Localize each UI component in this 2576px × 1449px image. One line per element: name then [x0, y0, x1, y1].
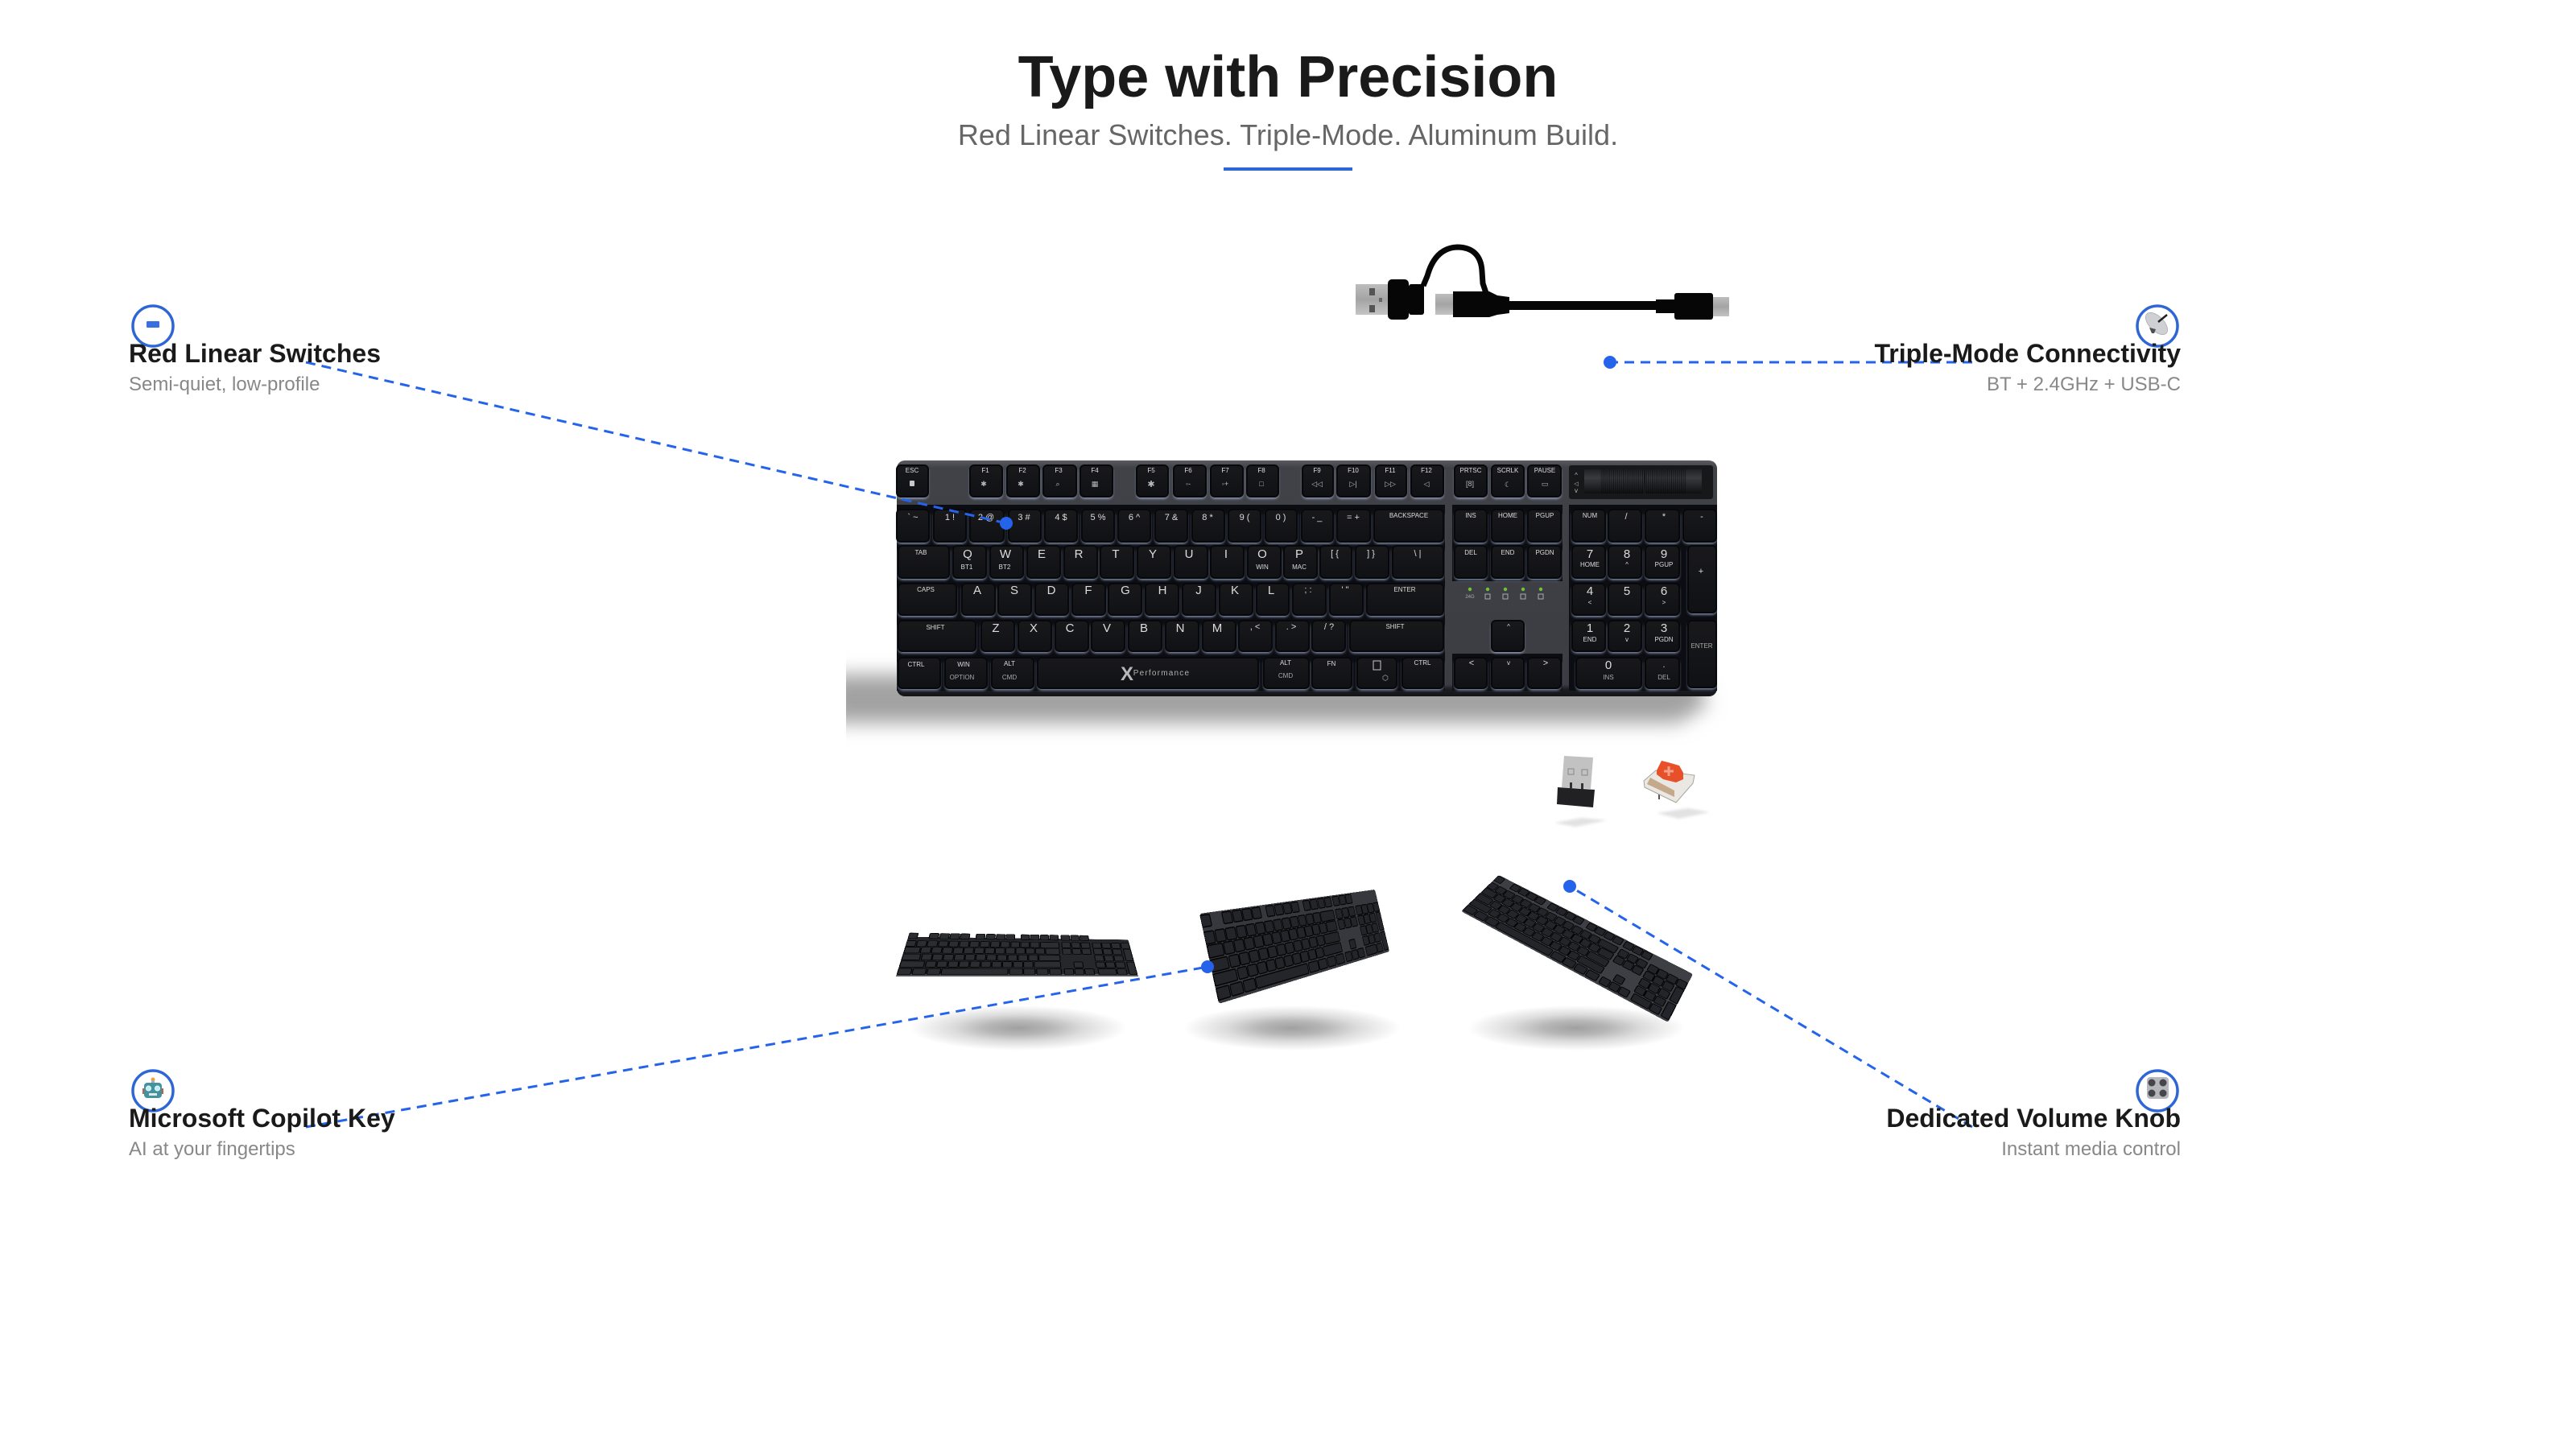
key legends: SHIFT	[926, 624, 945, 631]
key legends: ✱	[980, 480, 987, 488]
key legends: J	[1195, 584, 1202, 597]
key legends: / ?	[1324, 622, 1334, 632]
key legends: END	[1501, 549, 1515, 556]
key legends: HOME	[1580, 561, 1600, 568]
key legends: WIN	[1256, 564, 1269, 571]
callout: triple-mode connectivity	[1875, 306, 2181, 395]
icon: robot	[133, 1071, 173, 1111]
key legends: CMD	[1278, 672, 1293, 679]
callout: dedicated volume knob	[1886, 1071, 2181, 1160]
key legends: DEL	[1464, 549, 1477, 556]
key legends: F6	[1184, 467, 1192, 474]
key legends: ⬡	[1382, 674, 1389, 682]
key legends: L	[1268, 584, 1274, 597]
key legends: +	[1699, 567, 1703, 576]
key legends: = +	[1347, 513, 1360, 522]
volume knob: v	[1575, 487, 1578, 494]
key legends: ENTER	[1393, 586, 1416, 593]
key legends: K	[1231, 584, 1239, 597]
icon: keyboard	[133, 306, 173, 346]
key legends: PGUP	[1655, 561, 1673, 568]
key legends: ◁	[1424, 480, 1430, 488]
key legends: ◁◁	[1311, 480, 1323, 488]
key legends: W	[1000, 547, 1012, 561]
key legends: ▷▷	[1385, 480, 1396, 488]
key legends: .	[1662, 660, 1666, 670]
key legends: 0	[1605, 658, 1612, 672]
key legends: ; :	[1304, 585, 1312, 595]
key legends: v	[1507, 659, 1510, 667]
volume knob: ^	[1575, 472, 1578, 479]
key legends: 6 ^	[1129, 513, 1141, 522]
key legends: END	[1583, 636, 1597, 643]
key legends: D	[1047, 584, 1056, 597]
main keyboard	[829, 460, 1717, 723]
key legends: ] }	[1367, 549, 1375, 559]
key legends: ` ~	[907, 513, 919, 522]
key legends: ALT	[1004, 660, 1015, 667]
key legends: SHIFT	[1385, 623, 1405, 630]
keyboard cast shadow	[829, 675, 1708, 723]
key legends: F11	[1385, 467, 1396, 474]
key legends: 2 @	[978, 513, 994, 522]
key legends: v	[1625, 636, 1629, 643]
key legends: CTRL	[908, 661, 925, 668]
key legends: <	[1469, 658, 1474, 668]
key legends: /	[1624, 512, 1628, 522]
key legends: >	[1543, 658, 1548, 668]
leader line: triple-mode connectivity	[1604, 356, 1972, 369]
key legends: 9	[1661, 547, 1667, 561]
callout heading: Triple-Mode Connectivity	[1875, 339, 2181, 368]
key legends: 3 #	[1018, 513, 1031, 522]
key legends: FN	[1327, 660, 1336, 667]
callout description: Semi-quiet, low-profile	[129, 374, 320, 395]
key legends: TAB	[915, 549, 927, 556]
key legends: PGDN	[1654, 636, 1674, 643]
key legends: I	[1224, 547, 1228, 561]
key legends: - _	[1312, 513, 1323, 522]
key legends: F7	[1221, 467, 1229, 474]
key legends: ^	[1507, 623, 1510, 630]
key legends: ◦-	[1186, 480, 1191, 488]
leader line: volume knob	[1563, 880, 1972, 1127]
key legends: F5	[1147, 467, 1155, 474]
key legends: V	[1103, 621, 1111, 635]
key legends: NUM	[1583, 512, 1597, 519]
key legends: F	[1084, 584, 1092, 597]
key legends: [ {	[1331, 549, 1339, 559]
subtitle: Red Linear Switches. Triple-Mode. Aluminum Build.	[958, 118, 1618, 151]
key legends: S	[1010, 584, 1018, 597]
callout description: Instant media control	[2001, 1138, 2181, 1160]
callout heading: Dedicated Volume Knob	[1886, 1104, 2181, 1133]
product image: keyboard left angle	[1199, 890, 1389, 1003]
callout description: AI at your fingertips	[129, 1138, 295, 1160]
key legends: 7 &	[1165, 513, 1179, 522]
key legends: CAPS	[917, 586, 935, 593]
key legends: ' "	[1341, 585, 1349, 595]
key legends: SCRLK	[1497, 467, 1519, 474]
key legends: O	[1257, 547, 1267, 561]
key legends: 4 $	[1055, 513, 1067, 522]
key legends: BT1	[961, 564, 973, 571]
leader line: copilot key	[306, 960, 1214, 1127]
key legends: HOME	[1498, 512, 1517, 519]
key legends: ⌕	[1055, 480, 1060, 488]
key legends: F9	[1313, 467, 1321, 474]
leader line: red linear switches	[306, 362, 1013, 530]
key legends: 1 !	[945, 513, 955, 522]
product image: USB cable	[1356, 247, 1729, 320]
key legends: INS	[1603, 674, 1614, 681]
key legends: PAUSE	[1534, 467, 1555, 474]
key legends: DEL	[1657, 674, 1670, 681]
product image: keyboard right angle	[1462, 876, 1692, 1022]
key legends: Z	[992, 621, 1000, 635]
key legends: [8]	[1466, 480, 1474, 488]
key legends: ◦+	[1222, 480, 1228, 488]
key legends: F4	[1091, 467, 1099, 474]
key legends: ▭	[1542, 480, 1548, 488]
key legends: ✱	[1018, 480, 1024, 488]
key legends: \ |	[1414, 549, 1421, 559]
callout: red linear switches	[129, 306, 381, 395]
key legends: ☾	[1505, 481, 1511, 489]
key legends: OPTION	[950, 674, 975, 681]
key legends: F1	[981, 467, 989, 474]
key legends: ▦	[1092, 480, 1098, 488]
key legends: Performance	[1133, 669, 1190, 678]
key legends: 6	[1661, 584, 1667, 598]
key legends: M	[1212, 621, 1222, 635]
key legends: T	[1112, 547, 1120, 561]
key legends: ALT	[1280, 659, 1291, 667]
key legends: ▷|	[1349, 480, 1357, 488]
product image: red linear switch	[1644, 761, 1710, 819]
callout heading: Microsoft Copilot Key	[129, 1104, 395, 1133]
callout heading: Red Linear Switches	[129, 339, 381, 368]
key legends: H	[1158, 584, 1166, 597]
key legends: N	[1176, 621, 1184, 635]
indicator LEDs	[1465, 588, 1543, 600]
key legends: <	[1588, 599, 1592, 606]
volume knob	[1569, 465, 1713, 499]
title: Type with Precision	[1018, 45, 1558, 109]
key legends: MAC	[1292, 564, 1307, 571]
key legends: PRTSC	[1460, 467, 1482, 474]
key legends: ESC	[906, 467, 919, 474]
key legends: PGUP	[1536, 512, 1554, 519]
key legends: 1	[1587, 621, 1593, 635]
key legends: G	[1121, 584, 1130, 597]
key legends: X	[1030, 621, 1038, 635]
volume knob: ◁	[1574, 481, 1579, 487]
key legends: R	[1075, 547, 1084, 561]
icon: control knobs	[2137, 1071, 2178, 1111]
key legends: BT2	[999, 564, 1011, 571]
key legends: >	[1662, 599, 1666, 606]
key legends: U	[1185, 547, 1193, 561]
key legends: CMD	[1002, 674, 1017, 681]
key legends: 8 *	[1202, 513, 1213, 522]
product image: keyboard front angle	[896, 932, 1138, 976]
key legends: 9 (	[1240, 513, 1250, 522]
keyboard body	[897, 460, 1717, 696]
key legends: F8	[1257, 467, 1265, 474]
key legends: WIN	[957, 661, 970, 668]
key legends: , <	[1250, 622, 1260, 632]
key legends: . >	[1286, 622, 1296, 632]
key legends: F12	[1421, 467, 1432, 474]
key legends: 0 )	[1276, 513, 1286, 522]
key legends: 7	[1587, 547, 1593, 561]
key legends: *	[1662, 512, 1666, 522]
key legends: F3	[1055, 467, 1063, 474]
title accent underline	[1224, 167, 1352, 171]
callout: microsoft copilot key	[129, 1071, 395, 1160]
key legends: ✱	[1147, 480, 1155, 489]
key legends: Y	[1149, 547, 1157, 561]
key legends: □	[1259, 480, 1264, 488]
key legends: Q	[963, 547, 972, 561]
key legends: 5 %	[1091, 513, 1106, 522]
key legends: 3	[1661, 621, 1667, 635]
key legends: X	[1121, 663, 1133, 685]
key legends: ENTER	[1690, 642, 1713, 650]
key legends: C	[1066, 621, 1075, 635]
key legends: 4	[1587, 584, 1593, 598]
key legends	[906, 467, 1713, 685]
key legends: F2	[1018, 467, 1026, 474]
key legends: P	[1295, 547, 1303, 561]
icon: satellite dish	[2137, 306, 2178, 346]
key legends: 5	[1624, 584, 1630, 598]
key legends: PGDN	[1535, 549, 1554, 556]
key legends: 8	[1624, 547, 1630, 561]
key legends: E	[1038, 547, 1046, 561]
indicator LEDs: 24G	[1465, 595, 1475, 600]
callout description: BT + 2.4GHz + USB-C	[1987, 374, 2181, 395]
key legends: BACKSPACE	[1389, 512, 1428, 519]
key legends: B	[1140, 621, 1148, 635]
key legends: F10	[1348, 467, 1359, 474]
key legends: 2	[1624, 621, 1630, 635]
floor shadows under angled keyboards	[910, 1005, 1685, 1051]
product image: USB dongle	[1554, 756, 1607, 827]
key legends: CTRL	[1414, 659, 1431, 667]
key legends: INS	[1465, 512, 1476, 519]
key legends: A	[973, 584, 981, 597]
key legends: ^	[1625, 561, 1629, 568]
key legends: -	[1700, 512, 1703, 522]
